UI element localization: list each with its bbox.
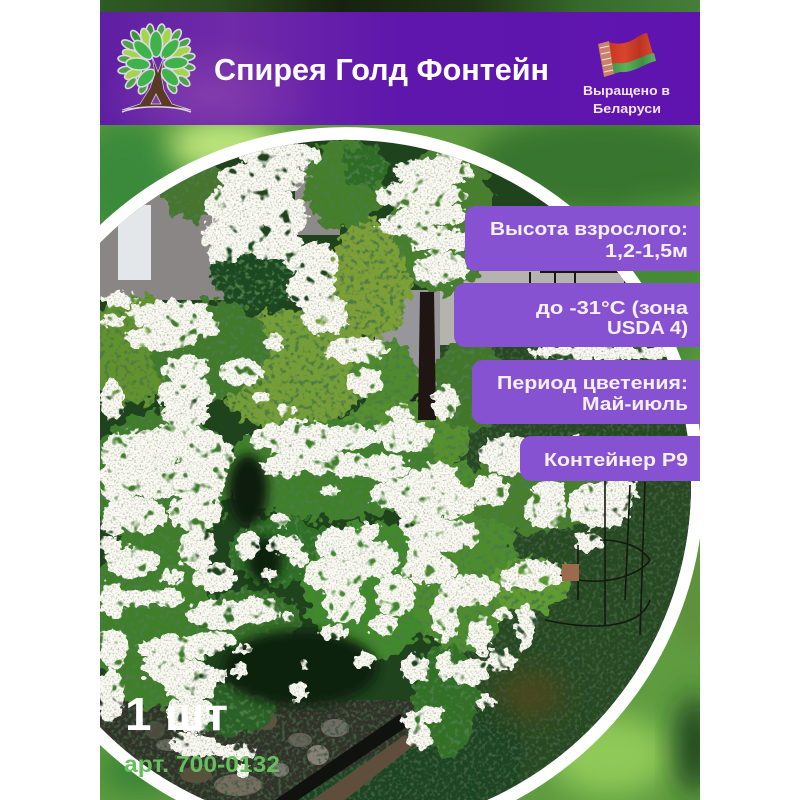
- caption: grown in Belarus: Выращено в: [583, 84, 670, 98]
- badge: flowering period: Период цветения:: [497, 373, 688, 393]
- path strip: [312, 735, 418, 800]
- caption: grown in Belarus: Беларуси: [593, 102, 661, 116]
- wall and background behind shrub: [100, 165, 700, 412]
- white ring around the photo: [100, 127, 700, 800]
- badge: frost hardiness: USDA 4): [607, 318, 688, 338]
- white flower clusters: [96, 141, 672, 778]
- badge: adult height: Высота взрослого:: [490, 219, 688, 239]
- badge: flowering period: Май-июль: [582, 394, 688, 414]
- icon: Belarus flag: [598, 33, 656, 77]
- quantity: 1 шт: [125, 688, 228, 740]
- article number: арт. 700-0132: [124, 751, 280, 777]
- tree trunk behind shrub: [418, 292, 436, 420]
- badge: container size: Контейнер P9: [544, 450, 688, 470]
- flower pot: [562, 564, 579, 581]
- badge: adult height: 1,2-1,5м: [605, 241, 688, 261]
- badge: flowering period: [472, 360, 700, 424]
- badge: frost hardiness: [454, 283, 700, 347]
- lawn: [280, 345, 700, 800]
- foliage: [85, 140, 610, 755]
- badge: frost hardiness: до -31°C (зона: [536, 298, 689, 318]
- stones at the bottom: [100, 700, 420, 800]
- infographic canvas: [100, 0, 700, 800]
- logo: tree: [117, 24, 196, 112]
- badge: container size: [520, 436, 700, 481]
- caption: grown in Belarus: [583, 84, 670, 116]
- dry patch on lawn: [496, 671, 564, 719]
- title: Спирея Голд Фонтейн: [214, 52, 549, 87]
- garden trellis: [530, 272, 650, 635]
- photo: flowering spirea shrub: [85, 130, 700, 800]
- badge: adult height: [465, 206, 700, 271]
- purple header banner: [100, 12, 700, 125]
- dark hollow under shrub: [222, 454, 378, 706]
- black lawn edging: [275, 714, 408, 800]
